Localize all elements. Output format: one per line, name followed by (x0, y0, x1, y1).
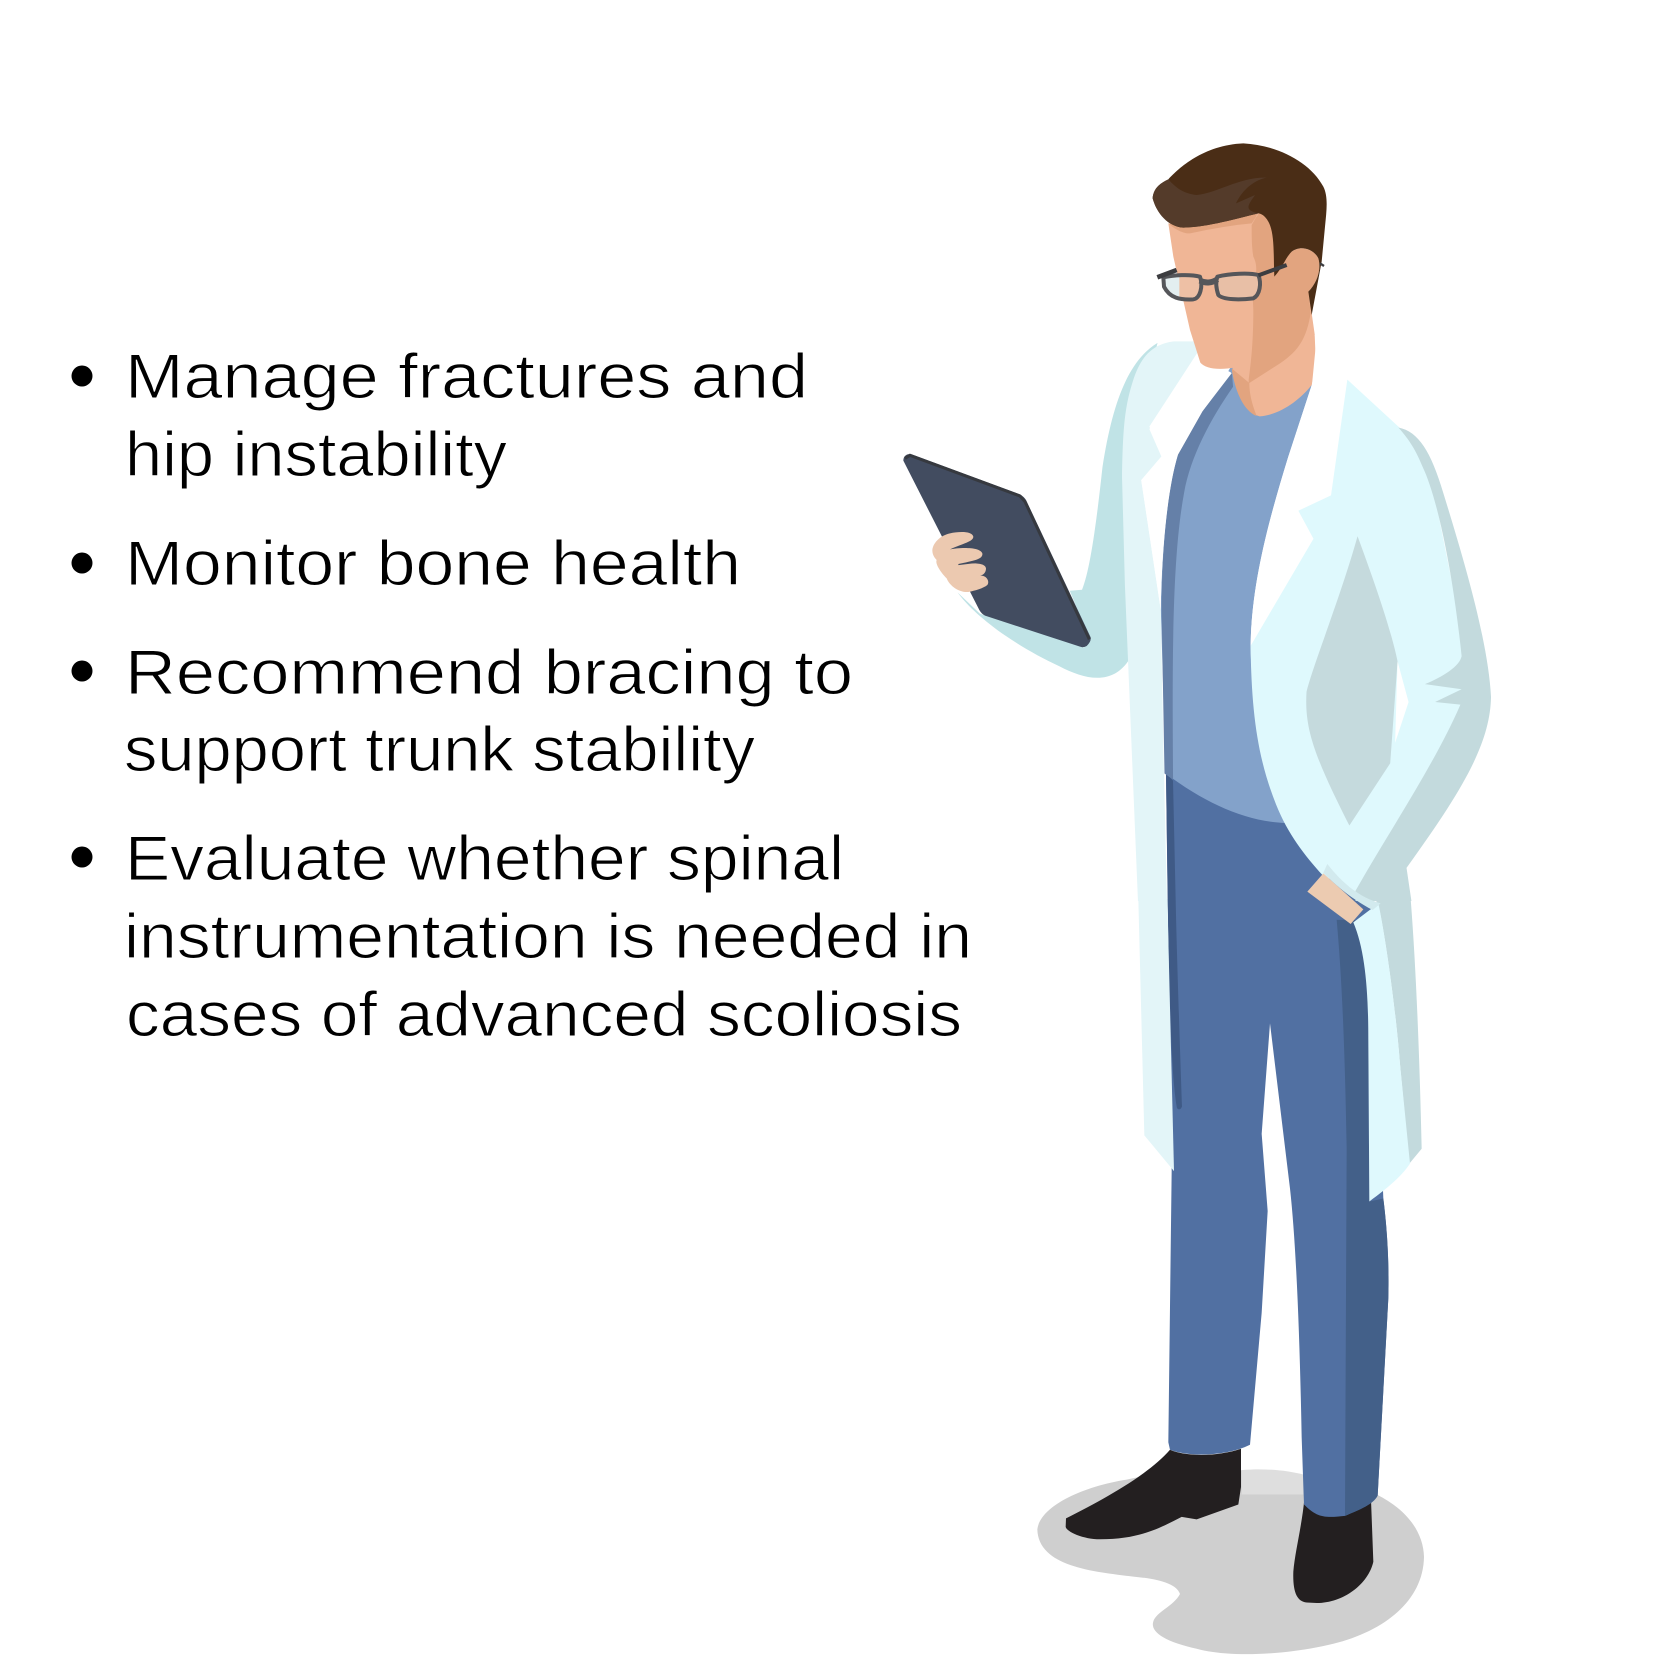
bullet: manage fractures: Manage fractures and (125, 342, 808, 412)
floor shadow (1037, 1469, 1424, 1654)
left coat lower (1138, 899, 1174, 1171)
coat inner shadow and arm gap (1306, 536, 1409, 826)
right coat lower (1353, 899, 1422, 1201)
bullet list (72, 342, 972, 1050)
right coat front (1251, 380, 1468, 892)
bullet: recommend bracing: support trunk stability (124, 715, 756, 785)
right coat arm shadow (1356, 428, 1491, 901)
neck (1232, 290, 1316, 416)
bullet: evaluate spinal instrumentation: instrumentation is needed in (124, 902, 972, 972)
left coat sleeve (958, 343, 1158, 678)
shoes (1066, 1449, 1373, 1603)
tablet (903, 454, 1091, 647)
hair (1153, 143, 1327, 315)
hand in pocket and cuff (1307, 864, 1381, 924)
doctor illustration (903, 143, 1491, 1654)
left coat panel and lapel (1122, 341, 1232, 901)
bullet: recommend bracing (72, 638, 853, 785)
glasses (1157, 263, 1324, 299)
bullet: recommend bracing: Recommend bracing to (125, 638, 853, 708)
hand holding tablet (932, 532, 988, 592)
bullet: evaluate spinal instrumentation: cases of advanced scoliosis (126, 980, 962, 1050)
bullet: manage fractures (72, 342, 808, 490)
bullet: monitor bone health: Monitor bone health (125, 529, 741, 599)
right coat lapel (1251, 335, 1347, 646)
bullet: evaluate spinal instrumentation (72, 824, 972, 1050)
bullet: evaluate spinal instrumentation: Evaluate whether spinal (125, 824, 844, 894)
shirt (1161, 365, 1312, 823)
face (1168, 213, 1319, 383)
trousers (1166, 774, 1389, 1517)
head (1153, 143, 1327, 383)
bullet: manage fractures: hip instability (125, 420, 508, 490)
